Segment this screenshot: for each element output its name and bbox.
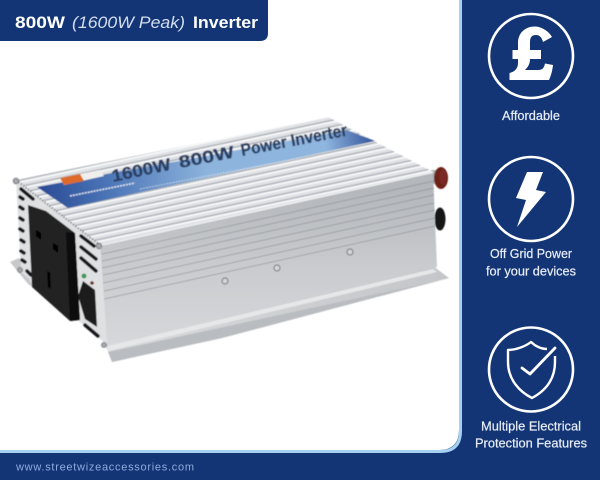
label heading: 1600W	[110, 155, 174, 186]
label brand badge	[60, 170, 104, 185]
title text	[15, 13, 258, 32]
side screws	[222, 249, 353, 284]
front end face	[16, 180, 107, 345]
website footer text: www.streetwizeaccessories.com	[15, 462, 194, 474]
rear mounting flange	[10, 258, 34, 288]
label: off grid power	[486, 246, 576, 278]
UK socket	[28, 205, 80, 321]
side face	[100, 172, 437, 345]
label heading: 800W	[177, 142, 237, 172]
label: off grid power: for your devices	[486, 264, 576, 278]
icon: lightning bolt in circle	[489, 157, 573, 241]
indicator LEDs	[82, 274, 94, 285]
front mounting flange	[105, 266, 449, 362]
top face with ridges	[16, 117, 433, 245]
title text: 800W	[15, 13, 66, 32]
power switch	[78, 281, 97, 327]
label: protection: Protection Features	[475, 436, 587, 450]
feature: affordable	[489, 14, 573, 123]
side ridges	[102, 181, 435, 299]
label: affordable: Affordable	[502, 108, 560, 123]
title banner	[0, 0, 268, 41]
label: protection: Multiple Electrical	[481, 418, 581, 434]
icon: pound in circle	[489, 14, 573, 98]
label heading: Power Inverter	[239, 121, 349, 160]
title text: Inverter	[193, 13, 258, 32]
blue label band	[37, 121, 375, 208]
main white panel with light blue border	[0, 0, 460, 452]
label heading	[110, 121, 349, 186]
label: protection	[475, 418, 587, 450]
corner screws	[13, 178, 107, 348]
icon: shield with check in circle	[489, 328, 573, 412]
vent slots	[20, 189, 98, 336]
feature: off grid power	[486, 157, 576, 278]
title text: (1600W Peak)	[72, 13, 185, 32]
feature: protection	[475, 328, 587, 450]
terminal: black	[434, 208, 446, 230]
terminal: red	[431, 167, 448, 189]
product photo: power inverter	[10, 117, 449, 362]
label: off grid power: Off Grid Power	[490, 246, 573, 261]
